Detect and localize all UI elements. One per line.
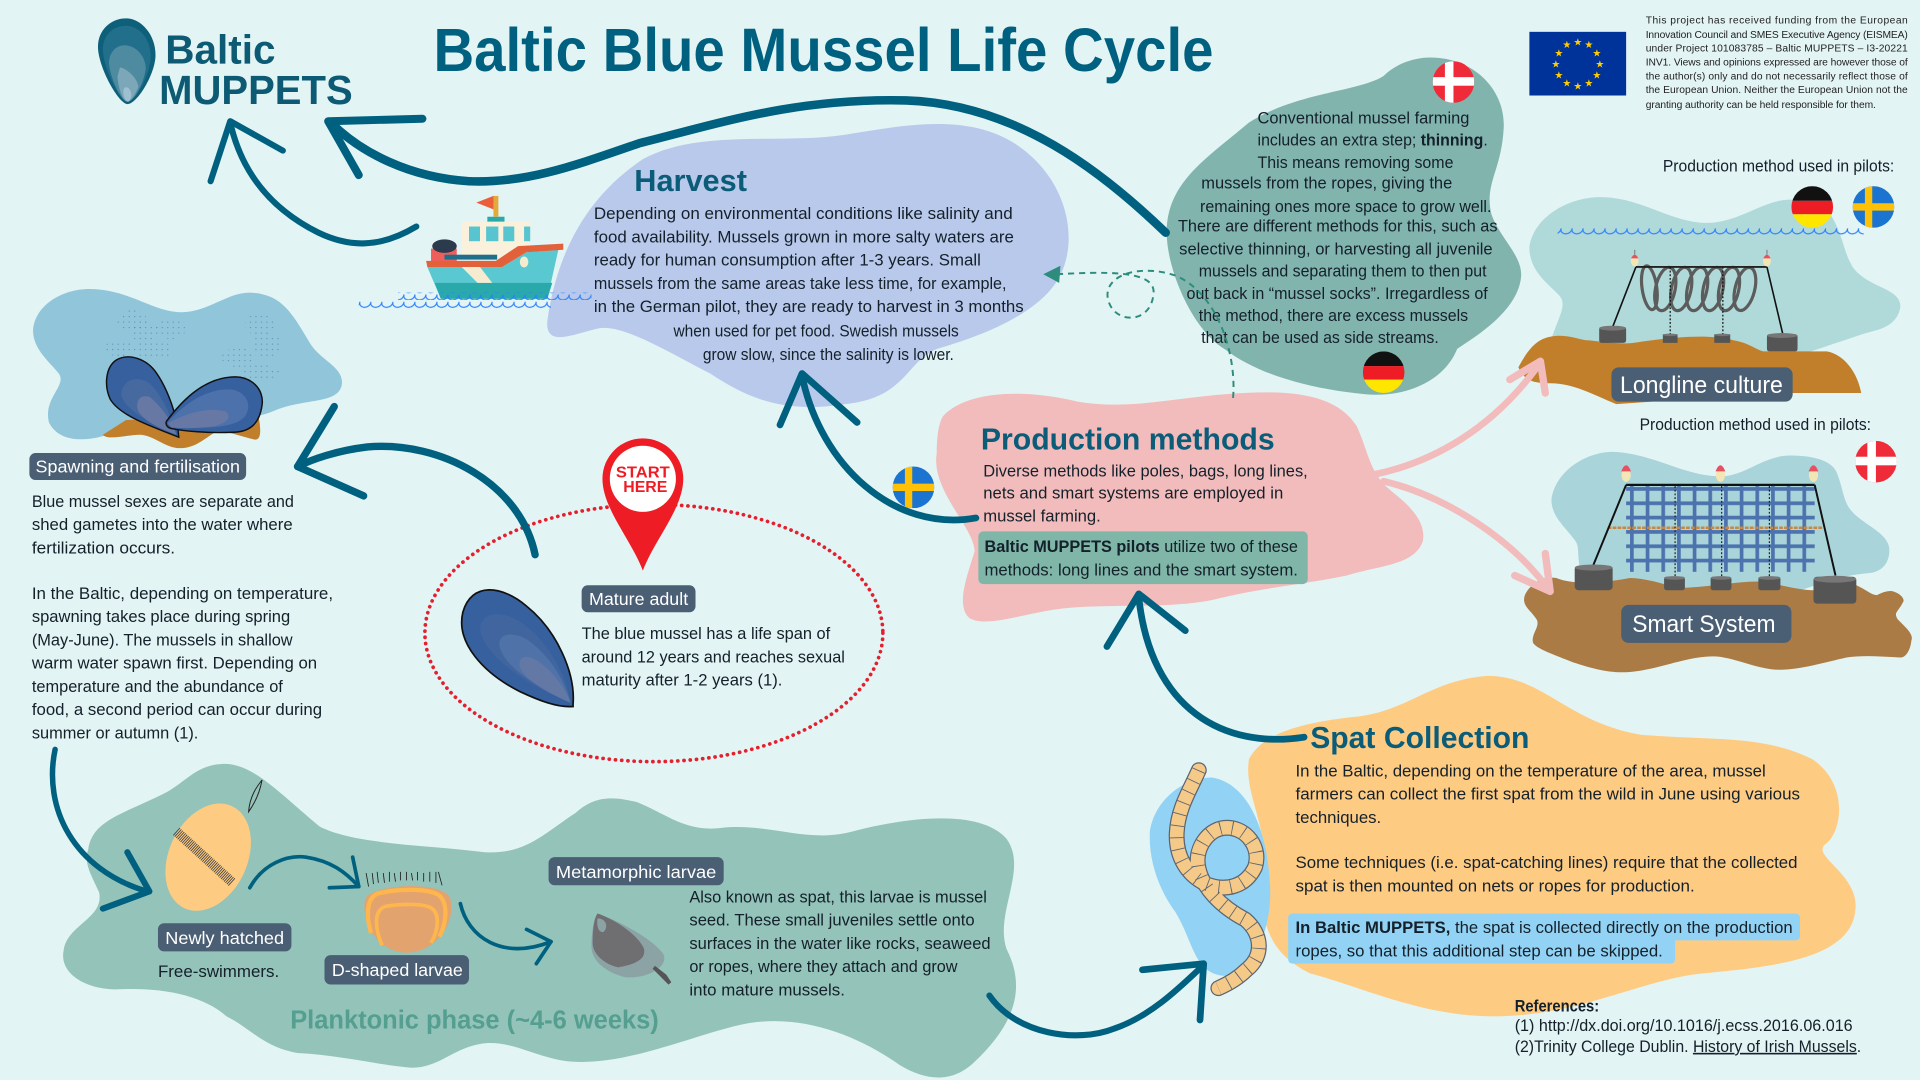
panel: planktonic phase: Free-swimmers.	[158, 963, 279, 981]
icon: newly hatched larva	[149, 780, 267, 925]
panel: planktonic phase: Newly hatched	[165, 928, 284, 948]
flag: Denmark thinning	[1433, 61, 1474, 103]
panel: mature adult: Mature adult	[589, 589, 688, 609]
panel: production methods: Production methods	[981, 422, 1275, 456]
icon: metamorphic larva	[591, 913, 670, 983]
panel: planktonic phase: seed. These small juveniles settle onto	[689, 912, 975, 930]
panel: spawning and fertilisation: warm water spawn first. Depending on	[31, 655, 317, 673]
panel: production methods: mussel farming.	[983, 508, 1101, 526]
icon: longline rig	[1613, 250, 1783, 334]
panel: thinning: Conventional mussel farming	[1258, 110, 1469, 128]
panel: thinning: remaining ones more space to grow well.	[1200, 198, 1491, 216]
EU flag: ★	[1562, 40, 1571, 51]
panel: spawning and fertilisation: Blue mussel sexes are separate and	[32, 493, 294, 511]
EU flag: ★	[1584, 40, 1593, 51]
panel: harvest: mussels from the same areas take less time, for example,	[594, 275, 1007, 293]
panel: harvest: in the German pilot, they are ready to harvest in 3 months	[594, 298, 1024, 316]
panel: longline culture	[1518, 157, 1900, 404]
panel: longline culture: Production method used in pilots:	[1663, 157, 1894, 175]
arrow: newly hatched to D-shaped	[250, 857, 359, 888]
panel: planktonic phase: surfaces in the water like rocks, seaweed	[689, 935, 991, 953]
panel: spawning and fertilisation: food, a second period can occur during	[32, 701, 322, 719]
flag: Sweden harvest	[893, 467, 934, 508]
EU flag: ★	[1554, 48, 1563, 59]
panel: harvest: Harvest	[634, 164, 747, 198]
panel: harvest: when used for pet food. Swedish mussels	[673, 323, 959, 341]
callout: pilots: methods: long lines and the smart system.	[984, 562, 1298, 580]
panel: spawning and fertilisation: fertilization occurs.	[32, 539, 175, 557]
funding statement: Innovation Council and SMES Executive Agency (EISMEA)	[1646, 30, 1908, 41]
panel: planktonic phase: Also known as spat, this larvae is mussel	[689, 888, 987, 906]
references	[1515, 997, 1861, 1056]
panel: longline culture: Longline culture	[1620, 372, 1783, 399]
arrow: thinning to logo	[328, 100, 1166, 233]
panel: harvest	[547, 124, 1069, 407]
panel: spat collection: techniques.	[1296, 809, 1381, 827]
panel: spawning and fertilisation	[29, 289, 342, 742]
icon: start here pin: START	[616, 465, 670, 482]
EU flag	[1529, 32, 1626, 96]
arrow: dashed thinning to harvest	[1043, 266, 1234, 398]
EU flag: ★	[1592, 70, 1601, 81]
flag: Denmark smart system	[1855, 441, 1897, 482]
arrow: spawning to newly hatched	[52, 749, 149, 909]
panel: spawning and fertilisation: spawning takes place during spring	[32, 608, 290, 626]
panel: spat collection: farmers can collect the first spat from the wild in June using various	[1296, 786, 1800, 804]
arrow: production to smart system	[1384, 481, 1550, 591]
panel: smart system: Smart System	[1632, 611, 1776, 638]
arrow: adult to spawning	[298, 407, 535, 555]
funding statement	[1646, 15, 1908, 111]
EU flag: ★	[1573, 37, 1582, 48]
panel: planktonic phase	[63, 764, 1016, 1077]
panel: planktonic phase: Metamorphic larvae	[556, 862, 716, 882]
EU flag: ★	[1551, 59, 1560, 70]
references: (1) http://dx.doi.org/10.1016/j.ecss.2016.06.016	[1515, 1017, 1853, 1035]
panel: spawning and fertilisation: Spawning and fertilisation	[36, 457, 240, 477]
panel: production methods	[936, 392, 1423, 622]
title: Baltic Blue Mussel Life Cycle	[433, 16, 1213, 84]
panel: planktonic phase: into mature mussels.	[689, 982, 845, 1000]
EU flag: ★	[1554, 70, 1563, 81]
icon: D-shaped larva	[364, 872, 451, 953]
references: (2)Trinity College Dublin. History of Irish Mussels.	[1515, 1038, 1861, 1056]
panel: smart system: Production method used in pilots:	[1640, 416, 1871, 434]
EU flag: ★	[1573, 81, 1582, 92]
panel: spawning and fertilisation: summer or autumn (1).	[32, 724, 198, 742]
icon: start here pin: HERE	[623, 479, 667, 496]
panel: spawning and fertilisation: In the Baltic, depending on temperature,	[32, 585, 333, 603]
panel: thinning: mussels and separating them to then put	[1199, 263, 1487, 281]
logo: Baltic MUPPETS: MUPPETS	[159, 67, 353, 113]
panel: mature adult: The blue mussel has a life span of	[582, 625, 831, 643]
EU flag: ★	[1562, 78, 1571, 89]
callout: pilots: Baltic MUPPETS pilots utilize two of these	[984, 538, 1298, 556]
panel: planktonic phase: D-shaped larvae	[332, 960, 463, 980]
EU flag: ★	[1595, 59, 1604, 70]
funding statement: granting authority can be held responsible for them.	[1646, 100, 1876, 111]
flag: Sweden longline	[1853, 186, 1894, 228]
callout: pilots	[978, 531, 1308, 584]
panel: thinning: that can be used as side streams.	[1201, 329, 1439, 347]
panel: thinning: mussels from the ropes, giving the	[1201, 175, 1452, 193]
panel: spat collection: Some techniques (i.e. spat-catching lines) require that the collected	[1296, 854, 1798, 872]
panel: mature adult: maturity after 1-2 years (1).	[582, 672, 782, 690]
panel: thinning: out back in “mussel socks”. Irregardless of	[1187, 285, 1488, 303]
icon: start here pin	[602, 438, 683, 571]
panel: thinning	[1167, 58, 1521, 395]
funding statement: the author(s) only and do not necessarily reflect those of	[1646, 72, 1908, 83]
panel: smart system	[1524, 416, 1912, 672]
flag: Germany longline	[1791, 186, 1833, 228]
panel: thinning: There are different methods for this, such as	[1178, 217, 1498, 235]
arrow: boat to logo	[211, 121, 416, 243]
icon: rope	[1177, 770, 1259, 988]
panel: spawning and fertilisation: shed gametes into the water where	[32, 516, 293, 534]
icon: mature mussel	[462, 590, 573, 707]
callout: Baltic MUPPETS spat: ropes, so that this additional step can be skipped.	[1296, 942, 1663, 960]
panel: mature adult: around 12 years and reaches sexual	[582, 648, 845, 666]
callout: Baltic MUPPETS spat: In Baltic MUPPETS, the spat is collected directly on the production	[1296, 919, 1793, 937]
funding statement: the European Union. Neither the European Union not the	[1646, 85, 1908, 96]
panel: harvest: Depending on environmental conditions like salinity and	[594, 205, 1013, 223]
panel: harvest: food availability. Mussels grown in more salty waters are	[594, 228, 1014, 246]
callout: Baltic MUPPETS spat	[1288, 913, 1800, 964]
icon: smart system rig	[1593, 465, 1836, 577]
funding statement: INV1. Views and opinions expressed are however those of	[1646, 58, 1908, 69]
panel: spat collection	[1150, 676, 1856, 1016]
arrow: production to harvest	[780, 373, 976, 520]
panel: thinning: includes an extra step; thinning.	[1258, 132, 1488, 150]
panel: thinning: selective thinning, or harvesting all juvenile	[1179, 241, 1493, 259]
icon: boat	[359, 196, 591, 309]
panel: spat collection: In the Baltic, depending on the temperature of the area, mussel	[1296, 762, 1766, 780]
arrow: D-shaped to metamorphic	[460, 904, 551, 964]
arrow: spat to production	[1107, 594, 1304, 739]
panel: spat collection: Spat Collection	[1310, 721, 1529, 755]
references: References:	[1515, 997, 1599, 1015]
panel: production methods: Diverse methods like poles, bags, long lines,	[983, 462, 1308, 480]
panel: spat collection: spat is then mounted on nets or ropes for production.	[1296, 877, 1695, 895]
panel: harvest: grow slow, since the salinity is lower.	[703, 346, 954, 364]
panel: production methods: nets and smart systems are employed in	[983, 484, 1283, 502]
funding statement: under Project 101083785 – Baltic MUPPETS – I3-20221	[1646, 43, 1908, 54]
panel: thinning: This means removing some	[1258, 154, 1453, 172]
panel: mature adult	[425, 504, 883, 762]
funding statement: This project has received funding from the European	[1646, 15, 1908, 26]
panel: planktonic phase: Planktonic phase (~4-6 weeks)	[290, 1007, 659, 1035]
arrow: metamorphic to spat	[989, 964, 1204, 1035]
EU flag: ★	[1584, 78, 1593, 89]
flag: Germany thinning	[1363, 351, 1404, 393]
panel: thinning: the method, there are excess mussels	[1199, 307, 1468, 325]
logo: Baltic MUPPETS	[98, 18, 353, 113]
logo: Baltic MUPPETS: Baltic	[165, 27, 276, 73]
panel: spawning and fertilisation: (May-June). The mussels in shallow	[32, 631, 293, 649]
panel: harvest: ready for human consumption after 1-3 years. Small	[594, 252, 981, 270]
arrow: production to longline	[1371, 361, 1545, 475]
EU flag: ★	[1592, 48, 1601, 59]
panel: planktonic phase: or ropes, where they attach and grow	[689, 958, 958, 976]
icon: open mussel shells	[107, 357, 262, 437]
panel: spawning and fertilisation: temperature and the abundance of	[32, 678, 283, 696]
